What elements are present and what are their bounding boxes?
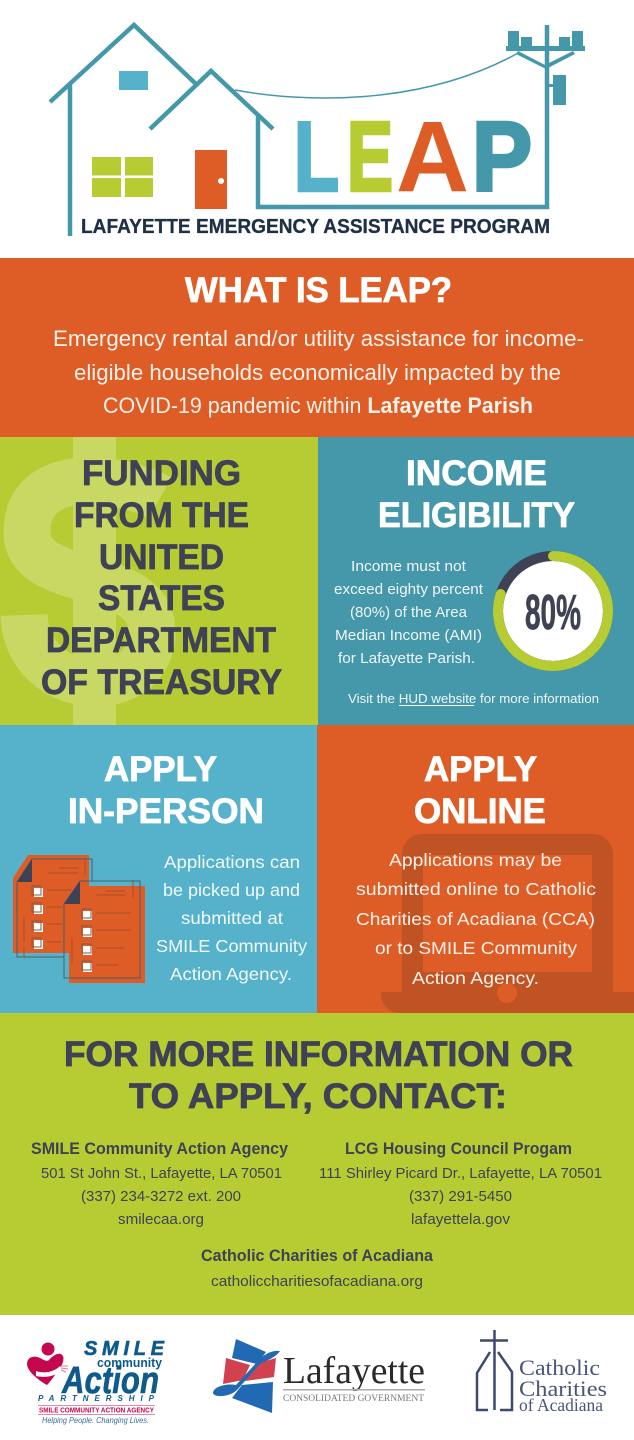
logo: SMILE Community Action — [27, 1338, 165, 1425]
contact: Catholic Charities: Catholic Charities of Acadiana — [201, 1247, 434, 1265]
icon: utility pole — [506, 31, 585, 105]
description — [53, 326, 584, 418]
heading: TO APPLY, CONTACT: — [129, 1077, 507, 1116]
heading — [68, 750, 264, 831]
heading: APPLY — [424, 750, 537, 789]
logo: Lafayette Consolidated Government: Lafayette — [283, 1350, 425, 1392]
logo: Catholic Charities of Acadiana — [477, 1330, 607, 1415]
heading: FROM THE — [74, 496, 249, 535]
description: Emergency rental and/or utility assistance for income- — [53, 326, 584, 351]
logo wordmark LEAP: L — [294, 102, 339, 212]
heading: ONLINE — [414, 792, 546, 831]
icon: dollar sign watermark — [24, 437, 160, 725]
text block: online: Applications may be — [389, 850, 562, 870]
logo: Catholic Charities of Acadiana: Charities — [519, 1376, 607, 1401]
heading: INCOME — [406, 454, 547, 493]
panel: what is LEAP — [0, 258, 634, 437]
program name: LAFAYETTE EMERGENCY ASSISTANCE PROGRAM — [81, 216, 550, 238]
contact: LCG Housing Council: lafayettela.gov — [411, 1212, 511, 1228]
contact: SMILE: (337) 234-3272 ext. 200 — [81, 1189, 241, 1205]
logo wordmark LEAP: P — [472, 102, 532, 212]
text block: online: Action Agency. — [412, 968, 539, 988]
text block: income rule: (80%) of the Area — [350, 604, 468, 621]
description: eligible households economically impacted by the — [74, 360, 561, 385]
heading: OF TREASURY — [41, 663, 282, 702]
logo: Lafayette Consolidated Government — [213, 1339, 425, 1413]
icon: laptop watermark — [381, 834, 634, 1013]
heading — [64, 1035, 573, 1116]
logo: SMILE Community Action: PARTNERSHIP — [38, 1394, 155, 1403]
logo: SMILE Community Action: community — [97, 1356, 162, 1370]
logo: SMILE Community Action: SMILE COMMUNITY ACTION AGENCY — [39, 1406, 154, 1414]
heading: FOR MORE INFORMATION OR — [64, 1035, 573, 1074]
text block: income rule — [334, 558, 484, 667]
icon: attic window — [119, 71, 148, 90]
contact: LCG Housing Council: LCG Housing Council Progam — [345, 1140, 572, 1158]
panel: apply in person — [0, 725, 317, 1013]
heading: ELIGIBILITY — [378, 496, 575, 535]
panel: contact — [0, 1013, 634, 1315]
text block: income rule: exceed eighty percent — [334, 581, 484, 598]
icon: Lafayette emblem — [213, 1339, 280, 1413]
contact: LCG Housing Council: (337) 291-5450 — [409, 1189, 512, 1205]
icon: house outline — [50, 25, 547, 236]
heading: APPLY — [104, 750, 217, 789]
contact: Catholic Charities — [201, 1247, 434, 1290]
logo wordmark LEAP: A — [396, 101, 469, 213]
HUD website note: Visit the HUD website for more information — [348, 691, 599, 706]
chart: 80 percent donut: 80% — [525, 586, 581, 640]
logo wordmark LEAP — [294, 101, 532, 213]
heading: UNITED — [99, 538, 224, 577]
contact: SMILE: 501 St John St., Lafayette, LA 70501 — [41, 1166, 282, 1182]
heading: STATES — [98, 579, 225, 618]
icon: cross and steeple — [477, 1330, 512, 1410]
icon: power line wire — [235, 52, 520, 98]
text block: income rule: Median Income (AMI) — [335, 627, 482, 644]
heading: IN-PERSON — [68, 792, 264, 831]
contact: Catholic Charities: catholiccharitiesofacadiana.org — [211, 1274, 423, 1290]
text block: in-person: Action Agency. — [170, 964, 292, 984]
logo: Lafayette Consolidated Government: CONSOLIDATED GOVERNMENT — [283, 1394, 424, 1404]
description: COVID-19 pandemic within Lafayette Parish — [103, 393, 533, 418]
heading: FUNDING — [82, 454, 241, 493]
contact: LCG Housing Council — [319, 1140, 602, 1228]
panel: income eligibility — [318, 437, 634, 725]
text block: online — [356, 850, 596, 988]
text block: in-person: Applications can — [164, 852, 300, 872]
text block: in-person: SMILE Community — [156, 936, 307, 956]
chart: 80 percent donut — [498, 556, 608, 666]
text block: in-person: submitted at — [181, 908, 283, 928]
icon: green window — [92, 157, 153, 197]
logo: SMILE Community Action: Action — [61, 1360, 159, 1402]
logo: SMILE Community Action: Helping People. Changing Lives. — [42, 1415, 149, 1425]
icon: heart with arms — [27, 1342, 68, 1385]
heading: DEPARTMENT — [46, 621, 276, 660]
heading — [378, 454, 575, 535]
heading: WHAT IS LEAP? — [185, 271, 452, 310]
heading — [414, 750, 546, 831]
contact: SMILE — [31, 1140, 289, 1228]
icon: application documents — [13, 855, 145, 983]
text block: income rule: for Lafayette Parish. — [338, 650, 475, 667]
text block: online: Charities of Acadiana (CCA) — [356, 909, 595, 929]
header logo: LEAP house — [50, 25, 585, 238]
contact: SMILE: smilecaa.org — [118, 1212, 204, 1228]
text block: online: submitted online to Catholic — [356, 879, 596, 899]
panel: funding — [0, 437, 318, 725]
text block: in-person: be picked up and — [163, 880, 300, 900]
heading — [41, 454, 282, 702]
logo wordmark LEAP: E — [347, 102, 393, 212]
logo: SMILE Community Action: SMILE — [84, 1338, 165, 1360]
text block: online: or to SMILE Community — [375, 938, 577, 958]
logo: Catholic Charities of Acadiana: Catholic — [519, 1355, 600, 1380]
icon: door — [195, 150, 227, 209]
contact: SMILE: SMILE Community Action Agency — [31, 1140, 289, 1158]
panel: apply online — [317, 725, 634, 1013]
logo: Catholic Charities of Acadiana: of Acadiana — [519, 1395, 603, 1415]
text block: in-person — [156, 852, 307, 984]
text block: income rule: Income must not — [351, 558, 467, 575]
contact: LCG Housing Council: 111 Shirley Picard Dr., Lafayette, LA 70501 — [319, 1166, 602, 1182]
